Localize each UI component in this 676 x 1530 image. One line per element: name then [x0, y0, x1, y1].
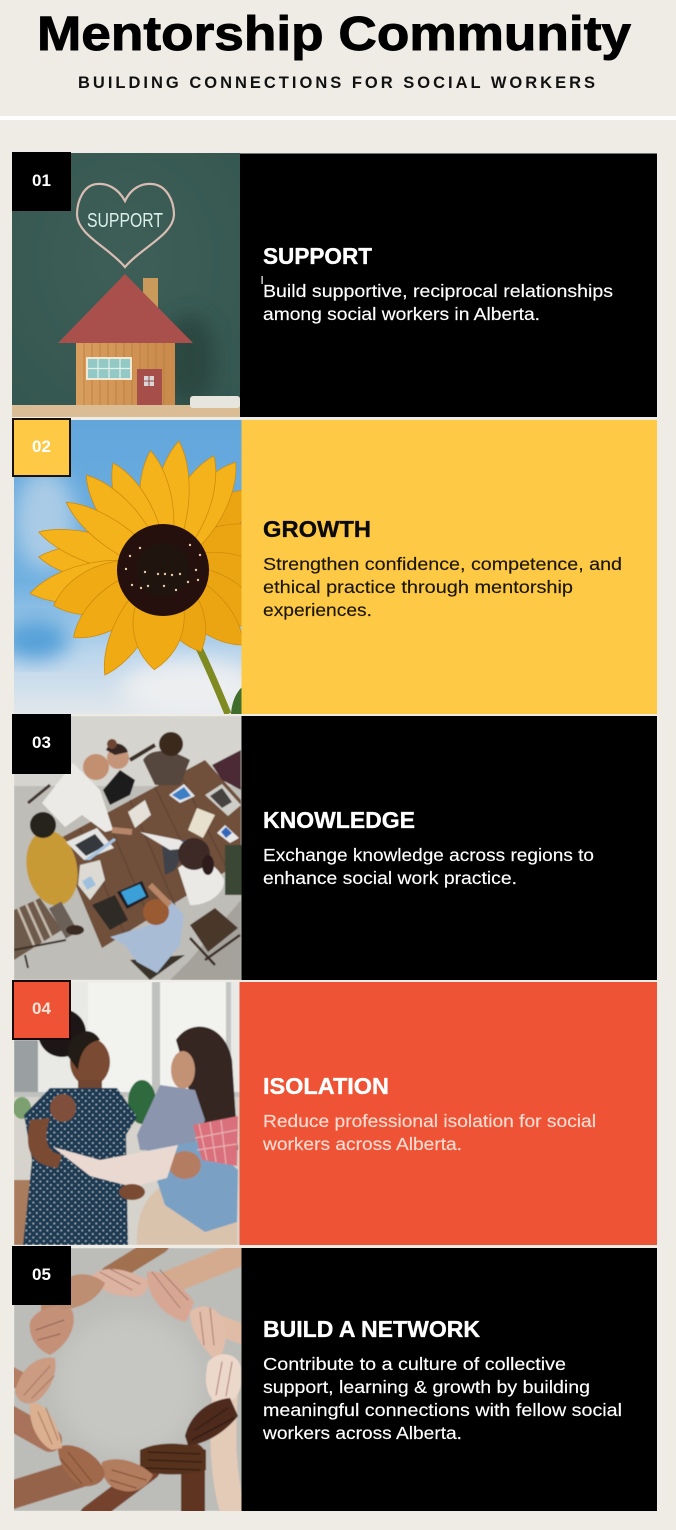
- number tag 05: [12, 1246, 71, 1305]
- number tag 04: [13, 981, 70, 1039]
- number tag 05: 05: [32, 1265, 51, 1284]
- heading: knowledge: KNOWLEDGE: [263, 807, 415, 833]
- photo: ring of linked arms: [14, 1248, 242, 1511]
- text: growth: Strengthen confidence, competence, and: [263, 554, 622, 574]
- text: build a network: meaningful connections with fellow social: [263, 1400, 622, 1420]
- man in yellow shirt: [26, 831, 78, 906]
- heading: support: SUPPORT: [263, 243, 372, 269]
- number tag 01: [12, 152, 71, 211]
- text: build a network: support, learning & growth by building: [263, 1377, 590, 1397]
- text: isolation: Reduce professional isolation for social: [263, 1111, 596, 1131]
- text: support: Build supportive, reciprocal relationships: [263, 281, 613, 301]
- man in blue shirt: [110, 900, 184, 973]
- text: build a network: [262, 1354, 622, 1443]
- panel: build a network: [0, 1244, 657, 1520]
- photo: sunflower against sky: [14, 420, 242, 714]
- text: growth: experiences.: [263, 600, 372, 620]
- panel background: build a network: [242, 1248, 657, 1511]
- text: knowledge: enhance social work practice.: [263, 868, 517, 888]
- panel: growth: [1, 419, 657, 720]
- laptops and tablets: [66, 828, 114, 860]
- man in white shirt: [42, 763, 113, 832]
- panel background: growth: [242, 420, 657, 714]
- text: knowledge: [263, 845, 594, 888]
- number tag 02: [13, 419, 70, 476]
- panel: isolation: [13, 981, 657, 1245]
- photo: house and heart on chalkboard: SUPPORT: [87, 210, 163, 232]
- photo: team around a table from above: [14, 716, 242, 980]
- panel background: isolation: [240, 982, 657, 1245]
- text: growth: ethical practice through mentorship: [263, 577, 573, 597]
- panel background: knowledge: [242, 716, 657, 980]
- text: isolation: workers across Alberta.: [262, 1134, 462, 1154]
- photo: two women talking over a document: [13, 982, 240, 1245]
- number tag 02: 02: [32, 437, 51, 456]
- text: support: [263, 281, 613, 324]
- linked hands forming the ring: [92, 1269, 148, 1297]
- number tag 04: 04: [32, 999, 51, 1018]
- text: build a network: Contribute to a culture of collective: [263, 1354, 566, 1374]
- text: build a network: workers across Alberta.: [262, 1423, 462, 1443]
- heading: growth: GROWTH: [263, 516, 371, 542]
- panel: knowledge: [12, 714, 657, 980]
- number tag 01: 01: [32, 171, 51, 190]
- chairs: [14, 898, 62, 960]
- number tag 03: [12, 714, 71, 774]
- heading: build a network: BUILD A NETWORK: [263, 1316, 480, 1342]
- people far side: [143, 751, 190, 785]
- woman in white top: [178, 861, 224, 905]
- panel background: support: [240, 154, 657, 417]
- photo: house and heart on chalkboard: [12, 153, 240, 417]
- text: knowledge: Exchange knowledge across regions to: [263, 845, 594, 865]
- document: [53, 1145, 178, 1187]
- subtitle: BUILDING CONNECTIONS FOR SOCIAL WORKERS: [78, 74, 595, 92]
- text: growth: [263, 554, 622, 620]
- panel: support: [12, 152, 657, 417]
- woman right: [176, 1027, 238, 1150]
- woman left: [38, 1009, 86, 1057]
- number tag 03: 03: [32, 733, 51, 752]
- text: support: among social workers in Alberta.: [263, 304, 540, 324]
- title: Mentorship Community: [37, 8, 631, 61]
- text: isolation: [262, 1111, 596, 1154]
- heading: isolation: ISOLATION: [263, 1073, 389, 1099]
